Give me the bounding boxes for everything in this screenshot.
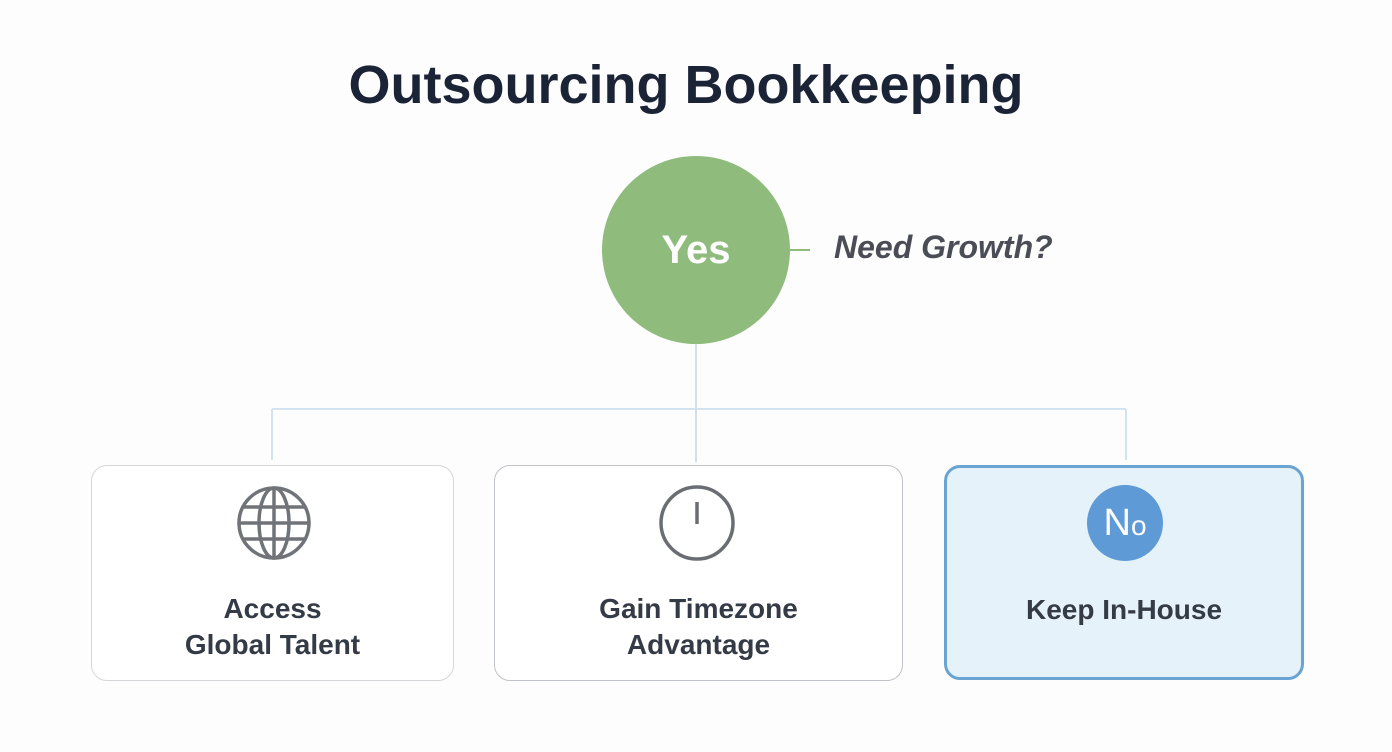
panel: timezone advantage [494,465,903,681]
question label: Need Growth? [834,229,1053,265]
panel: keep in-house [944,465,1304,680]
text: Advantage [627,629,770,660]
text [599,593,798,660]
yes circle: Yes [662,228,730,272]
yes circle [602,156,790,344]
text [185,593,360,660]
text: Global Talent [185,629,360,660]
text: Gain Timezone [599,593,798,624]
icon: clock [659,485,735,561]
title: Outsourcing Bookkeeping [348,55,1024,115]
icon: no badge [1087,485,1163,561]
text: Access [223,593,322,624]
panel: access global talent [91,465,454,681]
icon: globe [237,486,311,560]
icon: no badge: No [1103,502,1147,544]
text: Keep In-House [1026,594,1222,625]
